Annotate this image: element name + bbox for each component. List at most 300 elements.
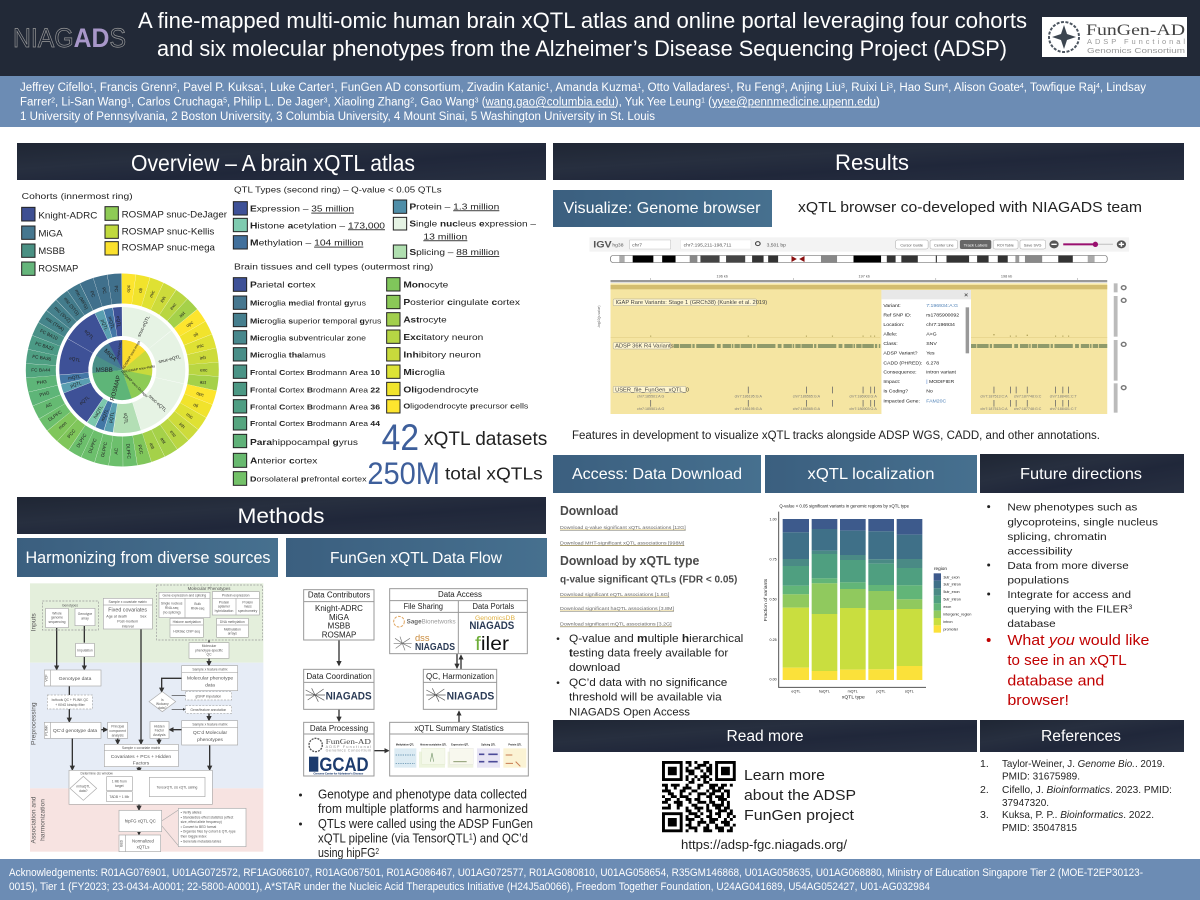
hipFG QC and outputs: • Organize files by cohort & QTL-type <box>181 830 236 834</box>
heading: References: References <box>1041 728 1121 745</box>
IGV toolbar: chr7:195,211-198,711 <box>684 243 732 247</box>
molecular phenotypes input: spectrometry <box>238 609 258 613</box>
y axis: 0.50 <box>770 598 777 602</box>
outer ring labels: mic (THA) <box>45 316 65 332</box>
outer ring labels: ast <box>199 379 207 385</box>
inner ring labels: MiGA <box>102 348 117 363</box>
y axis label: -log10(p-value) <box>597 305 601 328</box>
Data Processing box: Genomics Consortium <box>326 749 371 753</box>
track area: IGAP Rare Variants: Stage 1 (GRCh38) (Kunkle et al. 2019) <box>615 300 767 306</box>
author band background <box>0 76 1200 127</box>
xQTL Summary Statistics box: Histone acetylation QTL <box>420 744 447 747</box>
variant popup: Class: <box>883 341 898 347</box>
variant popup: No <box>926 389 933 395</box>
phenotype preprocessing: Is <box>161 698 164 702</box>
stage labels: Inputs <box>30 613 37 631</box>
track area: chr7:186195:G:A <box>735 395 763 398</box>
middle ring labels: pQTL <box>108 411 115 423</box>
Data Access box: Data Portals <box>472 602 514 611</box>
acknowledgements band <box>0 859 1200 900</box>
stat: 42 xQTL datasets <box>382 416 547 458</box>
heading: Read more: Read more <box>726 728 804 745</box>
combined covariates: Factors <box>133 760 150 766</box>
inner ring labels: ROSMAP snuc-mega <box>121 340 141 370</box>
text: methods bullets: using hipFG <box>318 845 388 860</box>
genotypes inputs: genome <box>51 616 63 620</box>
outer ring labels: DLPFC <box>87 437 98 454</box>
authors and affiliations: , FunGen AD consortium, Zivadin Katanic <box>334 82 546 94</box>
legend: cohorts: ROSMAP snuc-DeJager <box>122 209 227 219</box>
authors and affiliations: , Amanda Kuzma <box>550 82 638 94</box>
subheading: xQTL localization: xQTL localization <box>808 466 934 483</box>
logo: Sage Bionetworks: SageBionetworks <box>407 618 456 625</box>
authors and affiliations: 3 <box>324 98 328 104</box>
heading: Methods: Methods <box>238 505 324 528</box>
region legend: exon <box>943 605 951 609</box>
Data Processing box: FunGen-AD <box>326 737 371 746</box>
phenotype preprocessing: Analysis <box>153 733 166 737</box>
track area: chr7:187748:G:C <box>1014 395 1042 398</box>
text: future directions: accessibility <box>1007 546 1073 557</box>
variant popup <box>881 290 971 414</box>
molecular phenotypes input: aptamer <box>218 605 231 609</box>
legend: QTL types, tissues and cell types: 13 million <box>423 231 468 241</box>
legend: QTL types, tissues and cell types: Oligodendrocyte precursor cells <box>403 402 529 411</box>
cis window and QTL calling: m/haQTL <box>76 785 90 789</box>
variant popup: | MODIFIER <box>926 379 955 385</box>
phenotype preprocessing: Sample x feature matrix <box>192 668 228 672</box>
authors and affiliations <box>20 82 1146 123</box>
xQTL Summary Statistics box <box>390 722 528 776</box>
text: future directions: Integrate for access and <box>1007 590 1131 601</box>
screenshot: download page <box>560 504 737 627</box>
track area: ADSP 36K R4 Variants <box>615 344 674 350</box>
flowchart: harmonizing pipeline <box>30 583 263 852</box>
genotypes inputs: Imputation <box>77 648 93 652</box>
outer ring labels: oli <box>193 402 199 409</box>
Data Contributors box <box>304 590 374 640</box>
variant popup: 6.278 <box>926 361 939 366</box>
Data Contributors box: Knight-ADRC <box>315 604 363 613</box>
legend: QTL types, tissues and cell types: QTL Types (second ring) – Q-value < 0.05 QTLs <box>234 185 442 195</box>
stat: 42 xQTL datasets: xQTL datasets <box>424 429 547 450</box>
authors and affiliations: , Francis Grenn <box>94 82 173 94</box>
legend: QTL types, tissues and cell types: Microglia thalamus <box>250 353 326 360</box>
xQTL Summary Statistics box: xQTL Summary Statistics <box>414 724 504 733</box>
text: methods bullets: QTLs were called using the ADSP FunGen <box>318 816 533 831</box>
Data Processing box: ADSP Functional <box>326 745 371 749</box>
genotypes inputs: sequencing <box>48 620 66 624</box>
screenshot: download page: Download <box>560 504 618 518</box>
authors and affiliations: 1 <box>701 98 705 104</box>
screenshot: download page: Download significant mQTL associations [3.2G] <box>560 622 672 627</box>
molecular phenotypes input: (no splicing) <box>163 611 181 615</box>
logo: FunGen-AD: ADSP Functional <box>1087 37 1185 46</box>
authors and affiliations: , Pavel P. Kuksa <box>177 82 260 94</box>
outer ring labels: mic (MFG) <box>74 289 89 311</box>
flowchart: FunGen xQTL data flow <box>304 589 528 776</box>
phenotype preprocessing: Sample x feature matrix <box>192 723 228 727</box>
logo: dss NIAGADS <box>394 633 455 653</box>
outer ring labels: FC BA44 <box>31 368 51 372</box>
subheading: Harmonizing from diverse sources <box>17 538 278 577</box>
QC Harmonization box: QC, Harmonization <box>426 672 494 681</box>
genotype preprocessing: component <box>109 729 126 733</box>
legend: QTL types, tissues and cell types: Microglia superior temporal gyrus <box>250 318 382 325</box>
authors and affiliations: , Xiaoling Zhang <box>328 96 410 108</box>
genomic ruler: 196 kb <box>717 275 728 278</box>
text: download bullets <box>557 633 743 718</box>
legend: QTL types, tissues and cell types: Histone acetylation – 173,000 <box>250 220 385 230</box>
track area: chr7:185501:A:G <box>637 407 665 411</box>
outer ring labels: oli <box>193 331 199 338</box>
xQTL Summary Statistics box: Expression QTL <box>451 745 469 747</box>
IGV toolbar: IGV <box>593 240 612 250</box>
legend: QTL types, tissues and cell types: Microglia <box>403 367 445 377</box>
cis window and QTL calling: Determine cis window <box>80 771 113 775</box>
text: future directions: querying with the FILER <box>1007 604 1118 615</box>
y axis: Fraction of variants <box>763 578 769 621</box>
legend: QTL types, tissues and cell types: Single nucleus expression – <box>409 219 536 229</box>
outer ring labels: ast <box>159 437 167 445</box>
text: future directions: Data from more diverse <box>1007 561 1129 572</box>
Data Processing box: GCAD <box>319 755 369 776</box>
text: methods bullets: 2 <box>375 847 379 856</box>
legend: QTL types, tissues and cell types: Anterior cortex <box>250 456 318 466</box>
legend: QTL types, tissues and cell types: Microglia medial frontal gyrus <box>250 301 367 308</box>
legend: QTL types, tissues and cell types: Frontal Cortex Brodmann Area 44 <box>250 421 380 428</box>
title: and six molecular phenotypes from the Alzheimer’s Disease Sequencing Project (ADSP) <box>157 36 1007 61</box>
xQTL Summary Statistics box: Protein QTL <box>508 744 522 747</box>
hipFG QC and outputs: xQTLs <box>137 844 149 849</box>
x axis: sQTL <box>905 690 914 694</box>
variant popup: ADSP Variant? <box>883 351 918 357</box>
text: future directions: New phenotypes such as <box>1007 503 1137 514</box>
text: future directions: What you would like <box>1007 633 1149 649</box>
caption: features in development: Features in development to visualize xQTL tracks alongside ADSP WGS, CADD, and other annotations. <box>572 430 1100 442</box>
hipFG QC and outputs <box>119 808 246 852</box>
bar: haQTL <box>812 519 837 680</box>
variant popup: Location: <box>883 322 904 328</box>
region legend: 5utr_exon <box>943 590 960 594</box>
track settings column <box>1114 283 1126 413</box>
subheading: FunGen xQTL Data Flow <box>286 538 547 577</box>
authors and affiliations: 1 <box>726 83 730 90</box>
text: references list: 3. <box>980 809 989 821</box>
authors and affiliations: ( <box>479 96 486 108</box>
authors and affiliations: 3 <box>475 98 479 104</box>
subheading: FunGen xQTL Data Flow: FunGen xQTL Data Flow <box>330 550 502 567</box>
outer ring labels: PCC <box>137 444 144 455</box>
authors and affiliations: 1 <box>260 83 264 90</box>
legend: cohorts: Knight-ADRC <box>38 210 98 220</box>
molecular phenotypes input: Molecular Phenotypes <box>188 586 230 591</box>
text: browser note: xQTL browser co-developed with NIAGADS team <box>798 199 1142 216</box>
genomic ruler <box>610 275 1107 282</box>
outer ring labels: inh <box>199 355 207 361</box>
text: references list: PMID: 35047815 <box>1002 822 1077 834</box>
authors and affiliations: , Li-San Wang <box>55 96 127 108</box>
cis window and QTL calling <box>69 770 212 804</box>
molecular phenotypes input: mass <box>244 605 252 609</box>
authors and affiliations: , Ru Feng <box>730 82 781 94</box>
molecular phenotypes input: RNA-seq <box>165 606 179 610</box>
molecular phenotypes input: QC <box>206 653 212 657</box>
QC Harmonization box <box>423 669 497 709</box>
molecular phenotypes input <box>157 585 263 658</box>
variant popup: Yes <box>926 351 935 357</box>
outer ring labels: inh <box>159 295 167 303</box>
legend: cohorts: ROSMAP snuc-mega <box>122 243 216 253</box>
authors and affiliations: 3 <box>889 83 893 90</box>
variant popup: × <box>964 292 968 299</box>
authors and affiliations: ( <box>705 96 712 108</box>
molecular phenotypes input: Gene expression and splicing <box>162 594 206 598</box>
stage backgrounds <box>30 583 263 852</box>
screenshot: download page: Download significant eQTL associations [1.6G] <box>560 592 669 597</box>
covariates input: Fixed covariates <box>108 608 147 614</box>
Data Contributors box: ROSMAP <box>322 631 356 640</box>
inner ring labels: Knight-ADRC <box>116 340 123 360</box>
genomic ruler: 198 kb <box>1001 275 1012 278</box>
subheading: xQTL localization <box>765 455 977 493</box>
hipFG QC and outputs: then Giggle index <box>181 834 207 838</box>
legend: QTL types, tissues and cell types: Expression – 35 million <box>250 204 354 214</box>
legend: cohorts <box>22 191 227 275</box>
heading: Read more <box>553 720 977 752</box>
middle ring labels: eQTL <box>116 316 122 328</box>
region legend: promoter <box>943 627 959 631</box>
middle ring labels: mQTL <box>100 408 110 422</box>
cis window and QTL calling: TADB + 1 Mb <box>109 795 129 799</box>
logo: FunGen-AD: Genomics Consortium <box>1087 46 1185 55</box>
phenotype preprocessing: data? <box>158 706 167 710</box>
authors and affiliations: , Towfique Raj <box>1024 82 1096 94</box>
middle ring labels <box>68 315 182 425</box>
middle ring labels: mQTL <box>68 374 81 381</box>
authors and affiliations: 2 <box>51 98 55 104</box>
IGV toolbar: Track Labels <box>964 243 988 247</box>
text: references list: PMID: 31675989. <box>1002 770 1080 782</box>
covariates input: Post-mortem <box>117 620 138 624</box>
text: references list <box>980 758 1172 834</box>
bar: pQTL <box>868 519 894 680</box>
outer ring labels: FC BA22 <box>35 341 55 351</box>
variant popup: Allele: <box>883 332 897 337</box>
outer ring labels: AC <box>113 447 119 455</box>
genotype preprocessing: bcftools QC + PLINK QC <box>52 698 89 702</box>
molecular phenotypes input: Protein <box>242 600 253 604</box>
track area: chr7:185501:A:G <box>637 395 665 398</box>
text: references list: Kuksa, P. P.. Bioinformatics. 2022. <box>1002 809 1154 821</box>
hipFG QC and outputs: • Verify alleles <box>181 810 202 814</box>
phenotype preprocessing: Molecular phenotype <box>187 675 233 681</box>
legend: QTL types, tissues and cell types: Methylation – 104 million <box>250 238 364 248</box>
heading: Future directions <box>980 454 1184 493</box>
inner ring labels <box>96 340 156 402</box>
Data Processing box <box>304 722 374 776</box>
middle ring labels: haQTL <box>92 404 104 419</box>
text: methods bullets: ) and QC’d <box>473 830 528 846</box>
text: learn more <box>744 768 856 824</box>
text: future directions: glycoproteins, single nucleus <box>1007 517 1158 528</box>
outer ring labels: ast <box>149 442 156 450</box>
authors and affiliations: 1 <box>127 98 131 104</box>
track area <box>610 283 1107 414</box>
outer ring labels: PHG <box>36 379 47 385</box>
variant popup: Variant: <box>883 303 901 309</box>
legend: QTL types, tissues and cell types <box>233 185 536 485</box>
authors and affiliations: 4 <box>1020 83 1024 90</box>
legend: QTL types, tissues and cell types: Brain tissues and cell types (outermost ring) <box>234 261 433 271</box>
logo: dss NIAGADS: NIAGADS <box>415 642 455 653</box>
IGV toolbar <box>589 237 1129 252</box>
authors and affiliations: , Gao Wang <box>414 96 475 108</box>
genotypes inputs <box>42 601 98 657</box>
logo: NIAGADS: NIAGADS <box>13 23 126 53</box>
phenotype preprocessing: Factor <box>155 729 165 733</box>
cis window and QTL calling: 1 Mb from <box>112 779 127 783</box>
IGV toolbar: Cursor Guide <box>900 244 923 247</box>
phenotype preprocessing: Hidden <box>154 724 165 728</box>
inner ring labels: MSBB <box>96 368 113 374</box>
logo: dss NIAGADS: dss <box>415 633 430 643</box>
authors and affiliations: 2 <box>173 83 177 90</box>
title <box>138 8 1027 61</box>
middle ring labels: pQTL <box>100 319 109 332</box>
authors and affiliations: 1 <box>637 83 641 90</box>
outer ring labels: mic <box>196 342 205 349</box>
text: methods bullets: from multiple platforms and harmonized <box>318 801 528 816</box>
inner ring: cohorts <box>101 349 143 391</box>
text: learn more: Learn more <box>744 768 825 784</box>
phenotype preprocessing: Gene/feature annotation <box>190 708 226 712</box>
xQTL Summary Statistics box: Methylation QTL <box>396 744 415 747</box>
outer ring: brain tissues and cell types <box>7 255 237 485</box>
IGV toolbar: hg38 <box>612 243 624 248</box>
inner ring labels: ROSMAP snuc-DeJager <box>120 370 149 399</box>
genotypes inputs: Genotype <box>78 612 92 616</box>
track area: USER_file_FunGen_xQTL_0 <box>615 388 689 393</box>
QR code <box>662 761 736 832</box>
inner ring labels: ROSMAP snuc-Kellis <box>123 364 156 374</box>
authors and affiliations: 1 University of Pennsylvania, 2 Boston University, 3 Columbia University, 4 Mount Sinai, 5 Washington University in St. Louis <box>20 111 655 123</box>
region legend: region <box>934 566 947 571</box>
outer ring labels: opc <box>185 320 195 328</box>
middle ring labels: snuc-eQTL <box>136 315 151 338</box>
heading: Overview <box>17 143 546 180</box>
outer ring labels: PC <box>89 290 96 299</box>
outer ring labels: exc <box>169 429 178 439</box>
text: download bullets: Q-value and multiple hierarchical <box>569 633 743 645</box>
region legend: 3utr_intron <box>943 583 961 587</box>
authors and affiliations: 4 <box>944 83 948 90</box>
track area: chr7:186195:G:A <box>735 407 763 411</box>
Data Contributors box: MiGA <box>329 613 350 622</box>
title: A fine-mapped multi-omic human brain xQTL atlas and online portal leveraging four cohorts <box>138 8 1027 33</box>
variant popup: Ref SNP ID: <box>883 313 911 318</box>
text: references list: 2. <box>980 784 989 796</box>
text: learn more: FunGen project <box>744 808 854 824</box>
screenshot: IGV genome browser <box>589 237 1129 414</box>
molecular phenotypes input: phenotype-specific <box>195 648 223 652</box>
hipFG QC and outputs: • Convert to BED format <box>181 825 216 829</box>
Data Contributors box: Data Contributors <box>308 591 370 600</box>
text: methods bullets: xQTL pipeline (via TensorQTL <box>318 830 490 846</box>
chart: stacked bars of genomic regions by xQTL type: Q-value < 0.05 significant variants in genomic regions by xQTL type <box>779 503 910 508</box>
hipFG QC and outputs: Normalized <box>132 838 155 843</box>
legend: cohorts: ROSMAP snuc-Kellis <box>122 226 215 236</box>
Data Access box <box>390 589 527 655</box>
outer ring labels: ast <box>178 310 187 318</box>
legend: cohorts: MSBB <box>38 246 65 256</box>
track area: chr7:186903:G:A <box>849 407 878 411</box>
logo: GenomicsDB NIAGADS: NIAGADS <box>469 620 515 632</box>
text: future directions: database <box>1007 619 1056 630</box>
region legend: intergenic_region <box>943 612 971 616</box>
genomic ruler: 197 kb <box>858 275 870 278</box>
authors and affiliations: Jeffrey Cifello <box>20 82 89 94</box>
outer ring labels: PHG <box>39 390 50 398</box>
outer ring labels: AC <box>45 401 53 409</box>
stat: 42 xQTL datasets: 42 <box>382 416 419 458</box>
hipFG QC and outputs: size, effect allele frequency) <box>181 820 222 824</box>
variant popup: FAM20C <box>926 399 947 404</box>
hipFG QC and outputs: hipFG xQTL QC <box>125 818 156 823</box>
molecular phenotypes input: Histone acetylation <box>173 620 201 624</box>
text: references list: 37947320. <box>1002 797 1049 809</box>
subheading: Harmonizing from diverse sources: Harmonizing from diverse sources <box>26 548 270 567</box>
connectors <box>57 626 210 846</box>
authors and affiliations: , Otto Valladares <box>641 82 726 94</box>
outer ring labels: exc <box>200 368 208 372</box>
IGV toolbar: Center Line <box>934 244 954 247</box>
molecular phenotypes input: Protein <box>219 600 229 604</box>
legend: QTL types, tissues and cell types: Protein – 1.3 million <box>409 201 500 211</box>
IGV toolbar: ROI Table <box>997 244 1014 247</box>
variant popup: Impacted Gene: <box>883 399 920 404</box>
acknowledgements band: 0015), Tier 1 (FY2023; 23-0434-A0001; 22-5800-A0001), A*STAR under the Nucleic Acid Therapeutics Initiative (H24J5a0066), Freedom Together Foundation, U24AG041689, U54AG052427, U01-AG032984 <box>9 881 930 893</box>
stat: 250M total xQTLs: 250M <box>367 455 440 491</box>
authors and affiliations: , Philip L. De Jager <box>227 96 324 108</box>
variant popup: intron variant <box>926 370 957 376</box>
logo: FunGen-AD <box>1042 17 1187 57</box>
text: download bullets: download <box>569 662 620 674</box>
text: future directions: 3 <box>1128 604 1133 611</box>
authors and affiliations: , Ruixi Li <box>845 82 889 94</box>
variant popup: rs1785900092 <box>926 313 959 318</box>
Data Contributors box: MSBB <box>328 622 350 631</box>
middle ring labels: sQTL <box>123 413 129 425</box>
phenotype preprocessing: Wolcany <box>156 702 169 706</box>
region legend: 3utr_exon <box>943 575 960 579</box>
heading: Overview: Overview – A brain xQTL atlas <box>131 150 415 176</box>
molecular phenotypes input: H3K9ac ChIP-seq <box>173 629 200 633</box>
outer ring labels: opc <box>196 390 205 398</box>
stage labels: harmonization <box>39 799 46 841</box>
variant popup: chr7:196934 <box>926 322 955 328</box>
outer ring labels: exc <box>169 301 178 311</box>
phenotype preprocessing: data <box>205 683 215 689</box>
outer ring labels: DLPFC <box>125 443 132 460</box>
molecular phenotypes input: Single nucleus <box>161 601 183 605</box>
heading: Results: Results <box>835 150 909 175</box>
track area: chr7:187513:C:A <box>980 395 1008 398</box>
y axis: 0.75 <box>770 557 777 561</box>
legend: QTL types, tissues and cell types: Astrocyte <box>403 314 447 324</box>
phenotype preprocessing: gtSNP imputation <box>195 694 221 698</box>
variant popup: SNV <box>926 341 938 347</box>
